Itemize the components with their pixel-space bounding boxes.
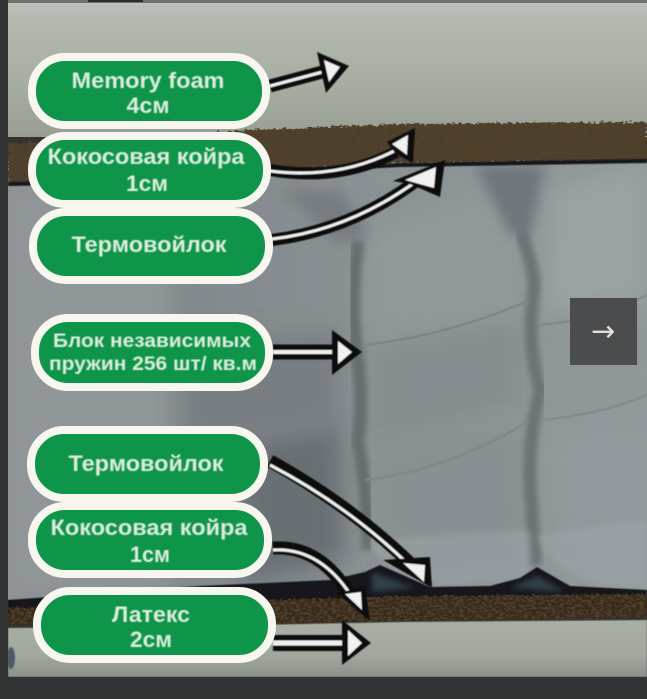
arrow: bottom thermo felt — [270, 461, 432, 588]
bottom dark margin — [0, 677, 647, 699]
arrow: latex — [273, 620, 371, 665]
bottom coconut coir layer — [8, 594, 647, 625]
label: Термовойлок — [33, 212, 269, 280]
label: Латекс 2см: 2см — [130, 627, 172, 652]
arrow: memory foam — [270, 52, 349, 93]
top memory foam layer — [8, 0, 647, 137]
label: Кокосовая койра lower: 1см — [130, 542, 170, 567]
icon: right arrow: → — [591, 314, 615, 348]
label: Memory foam 4см: 4см — [126, 93, 170, 118]
label: Кокосовая койра 1см — [32, 136, 267, 204]
next slide button — [570, 298, 637, 365]
label: Латекс 2см: Латекс — [112, 602, 190, 627]
label: Memory foam 4см — [32, 57, 266, 125]
label: Термовойлок: Термовойлок — [72, 232, 228, 257]
label: Блок независимых пружин: пружин 256 шт/ кв.м — [49, 353, 257, 375]
bottom latex layer — [8, 620, 647, 677]
label: Кокосовая койра lower — [32, 506, 268, 574]
dark spot at lower-left edge — [7, 647, 15, 669]
label: Кокосовая койра 1см: Кокосовая койра — [48, 144, 245, 169]
arrows — [270, 52, 445, 665]
pocket seams — [178, 165, 647, 565]
left dark margin — [0, 0, 8, 699]
top coconut coir layer — [8, 122, 647, 184]
arrow: spring block — [273, 330, 362, 375]
label: Блок независимых пружин — [35, 318, 269, 387]
label: Кокосовая койра 1см: 1см — [126, 171, 168, 196]
arrow: top coir — [270, 128, 415, 173]
label: Латекс 2см — [37, 591, 272, 659]
label: Термовойлок lower — [31, 430, 264, 498]
bottom dark fabric band — [8, 565, 647, 615]
label: Memory foam 4см: Memory foam — [72, 68, 224, 93]
label: Термовойлок lower: Термовойлок — [68, 451, 225, 476]
arrow: top thermo felt — [272, 160, 445, 240]
spring block — [8, 160, 647, 600]
label: Блок независимых пружин: Блок независимых — [53, 330, 251, 352]
arrow: bottom coir — [273, 548, 370, 621]
label: Кокосовая койра lower: Кокосовая койра — [50, 515, 248, 540]
